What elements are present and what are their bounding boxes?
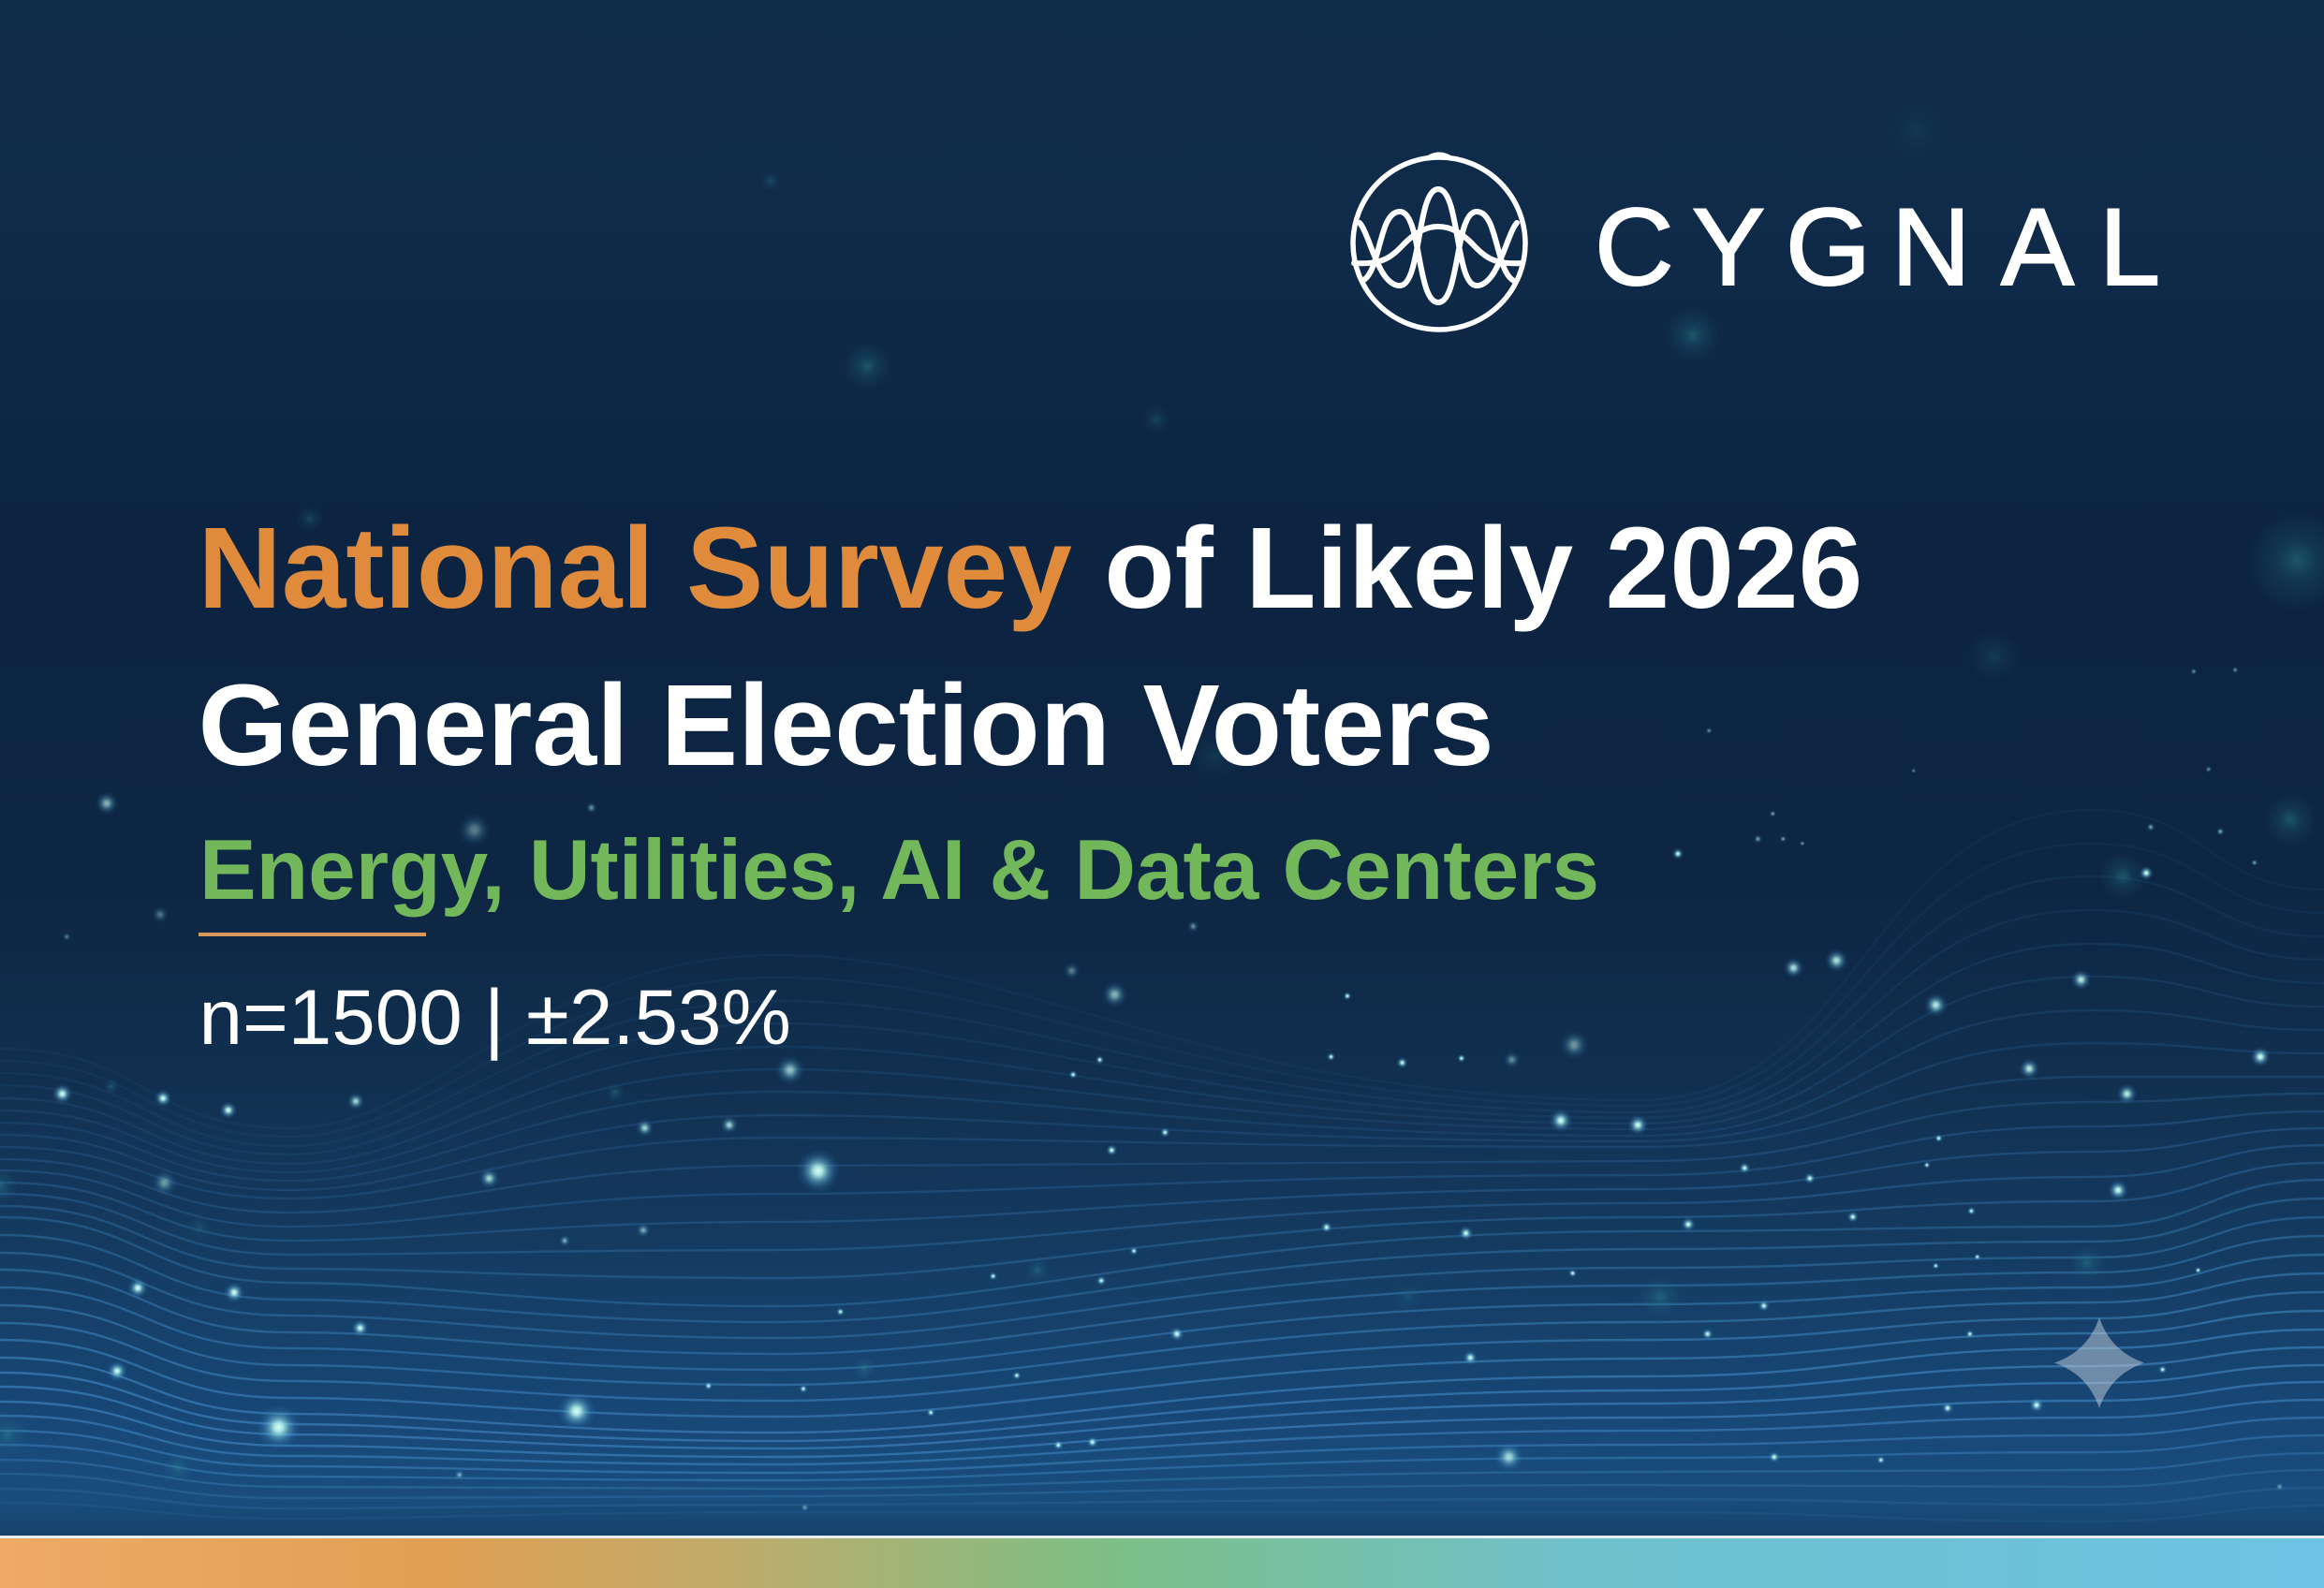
- icon: Cygnal wave circle: [1353, 155, 1525, 330]
- title line 2: General Election Voters: [199, 661, 1494, 790]
- logo: Cygnal: [1353, 155, 2160, 330]
- bottom gradient bar: [0, 1536, 2324, 1588]
- accent rule: [199, 933, 426, 936]
- wordmark: CYGNAL: CYGNAL: [1595, 185, 2160, 308]
- icon: sparkle star: [2054, 1317, 2144, 1408]
- title line 1: National Survey of Likely 2026: [199, 504, 1862, 633]
- title: [199, 504, 1862, 790]
- subtitle: Energy, Utilities, AI & Data Centers: [199, 823, 1599, 918]
- sample size and margin of error: n=1500 | ±2.53%: [199, 973, 791, 1061]
